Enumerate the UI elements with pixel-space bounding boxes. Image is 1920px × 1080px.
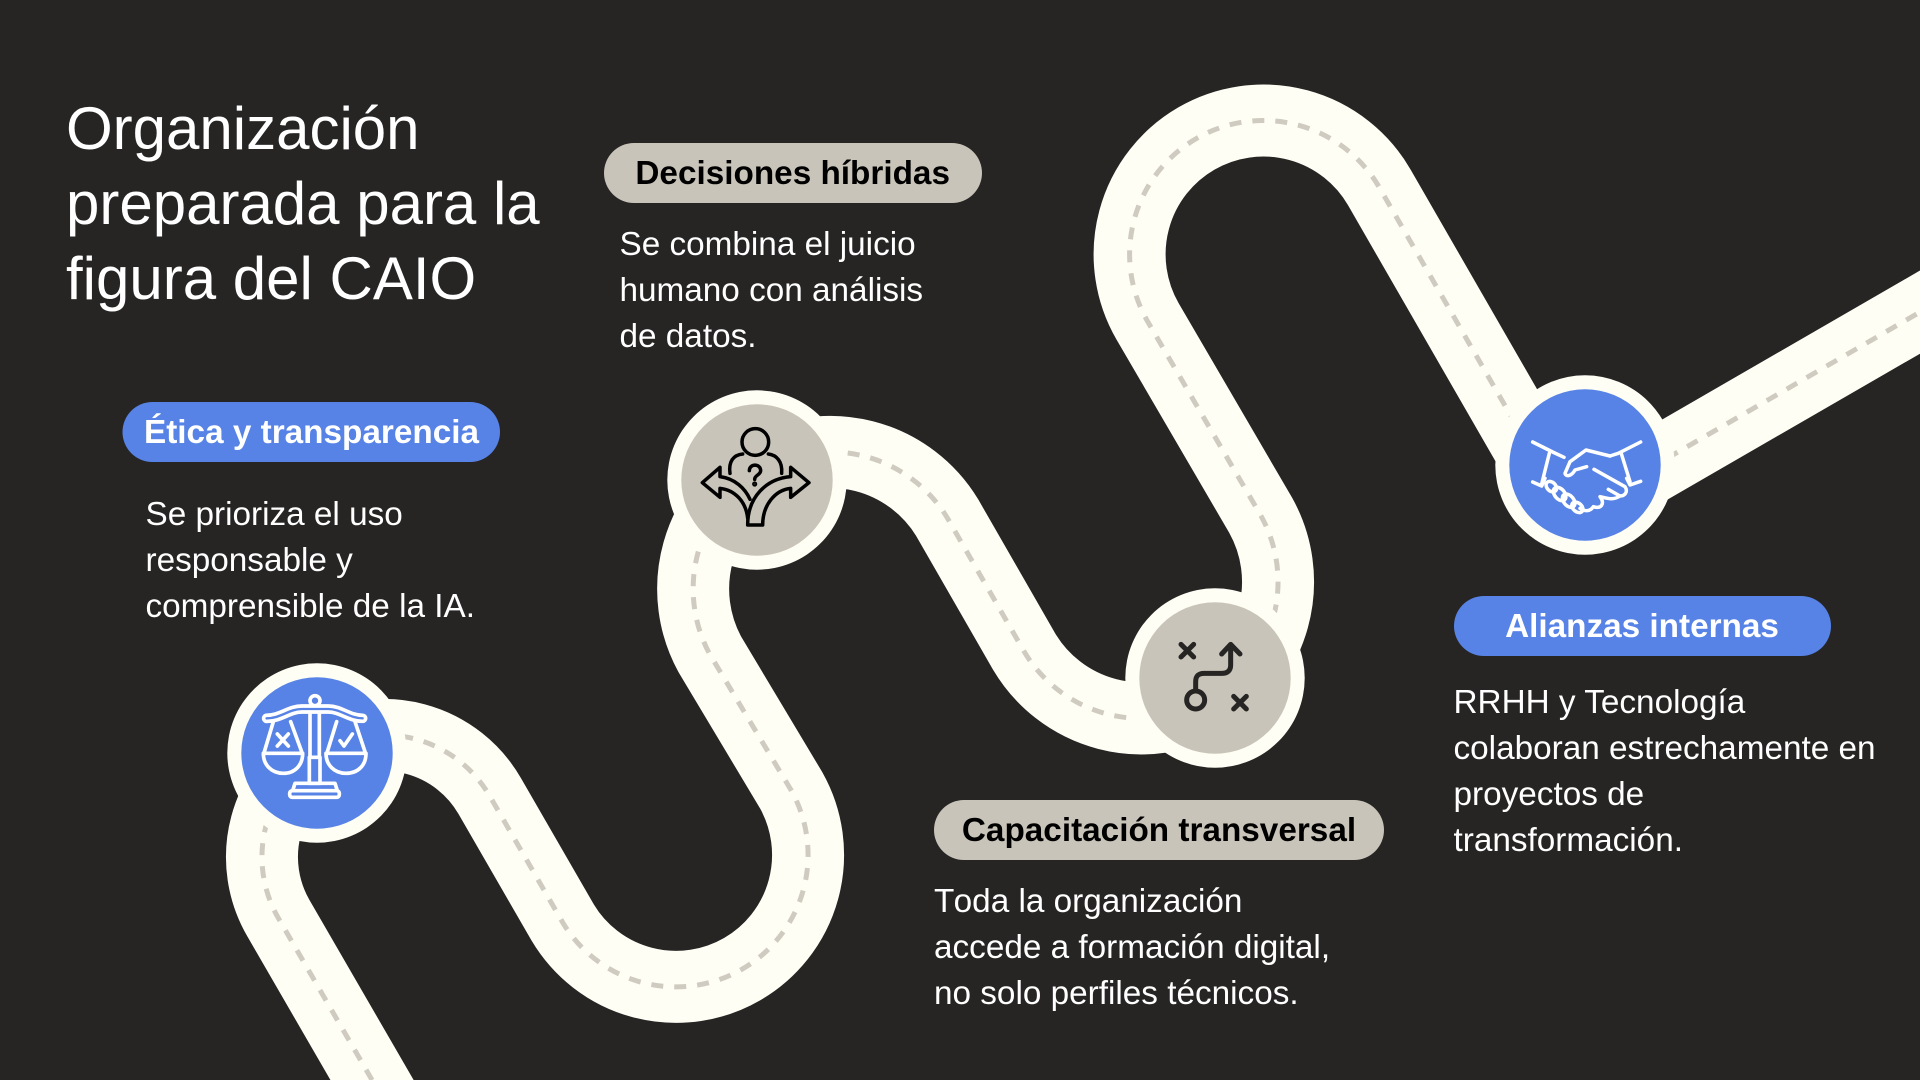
title: Organización (66, 95, 420, 162)
label pill: Alianzas internas (1454, 596, 1831, 656)
panel: Capacitación transversal (934, 800, 1384, 1012)
body text: Ética: responsable y (146, 542, 353, 579)
title: figura del CAIO (66, 245, 476, 312)
icon: person at a crossroads (667, 390, 847, 570)
winding road (262, 121, 1920, 1080)
body text: Ética: comprensible de la IA. (146, 588, 475, 625)
label pill: Ética y transparencia (122, 402, 500, 462)
label pill: Alianzas internas: Alianzas internas (1505, 608, 1779, 645)
icon: strategy route (1125, 588, 1305, 768)
title: preparada para la (66, 170, 540, 237)
body text: Decisiones: humano con análisis (620, 272, 923, 309)
panel: Alianzas internas (1454, 596, 1885, 859)
panel: Ética y transparencia (122, 402, 500, 625)
body text: Decisiones: de datos. (620, 318, 756, 355)
label pill: Decisiones híbridas: Decisiones híbridas (635, 155, 950, 192)
panel: Decisiones híbridas (604, 143, 982, 355)
label pill: Decisiones híbridas (604, 143, 982, 203)
body text: Alianzas: RRHH y Tecnología (1454, 684, 1746, 721)
body text: Alianzas: transformación. (1454, 822, 1683, 859)
label pill: Capacitación transversal (934, 800, 1384, 860)
body text: Decisiones: Se combina el juicio (620, 226, 916, 263)
body text: Capacitación: accede a formación digital, (934, 929, 1330, 966)
label pill: Capacitación transversal: Capacitación transversal (962, 812, 1356, 849)
icon: handshake (1495, 375, 1675, 555)
body text: Alianzas: colaboran estrechamente en (1454, 730, 1876, 767)
body text: Ética: Se prioriza el uso (146, 496, 403, 533)
body text: Capacitación: no solo perfiles técnicos. (934, 975, 1299, 1012)
icon: balance scale (227, 663, 407, 843)
body text: Capacitación: Toda la organización (934, 883, 1242, 920)
label pill: Ética y transparencia: Ética y transparencia (144, 413, 479, 451)
body text: Alianzas: proyectos de (1454, 776, 1644, 813)
